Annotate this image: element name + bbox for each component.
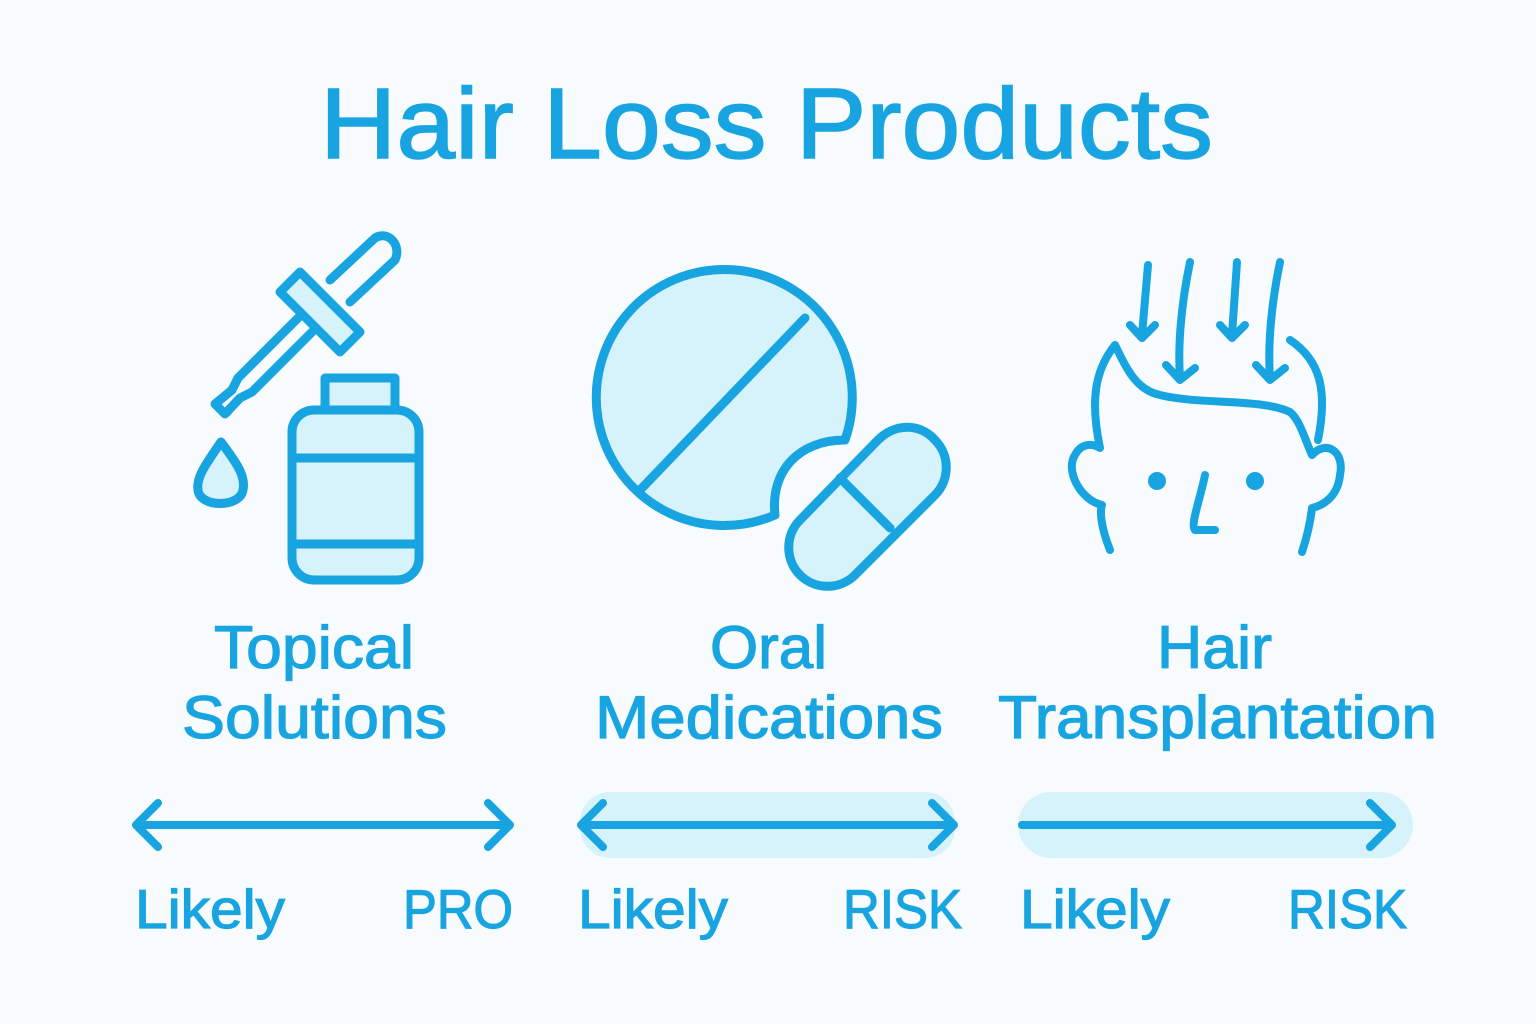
label: oral medications: Oral — [710, 614, 827, 681]
arrow: oral double — [580, 792, 955, 858]
scale labels: oral — [578, 878, 962, 940]
label: hair transplantation — [998, 614, 1437, 751]
icon: dropper and bottle — [198, 236, 419, 580]
scale labels: topical — [135, 878, 513, 940]
icon: head with transplant arrows — [1072, 262, 1341, 552]
scale labels: transplant — [1020, 878, 1407, 940]
label: topical solutions: Solutions — [182, 684, 447, 751]
scale labels: transplant: RISK — [1288, 878, 1407, 940]
label: hair transplantation: Hair — [1157, 614, 1272, 681]
label: hair transplantation: Transplantation — [998, 684, 1437, 751]
scale labels: oral: Likely — [578, 878, 729, 940]
scale labels: topical: PRO — [403, 878, 513, 940]
arrow: topical double — [136, 803, 510, 847]
scale labels: topical: Likely — [135, 878, 286, 940]
scale labels: oral: RISK — [843, 878, 962, 940]
title: Hair Loss Products — [320, 68, 1213, 180]
icon: pills — [596, 269, 946, 586]
label: topical solutions: Topical — [214, 614, 414, 681]
label: oral medications — [595, 614, 943, 751]
scale labels: transplant: Likely — [1020, 878, 1171, 940]
label: oral medications: Medications — [595, 684, 943, 751]
arrow: transplant single — [1018, 792, 1413, 858]
label: topical solutions — [182, 614, 447, 751]
